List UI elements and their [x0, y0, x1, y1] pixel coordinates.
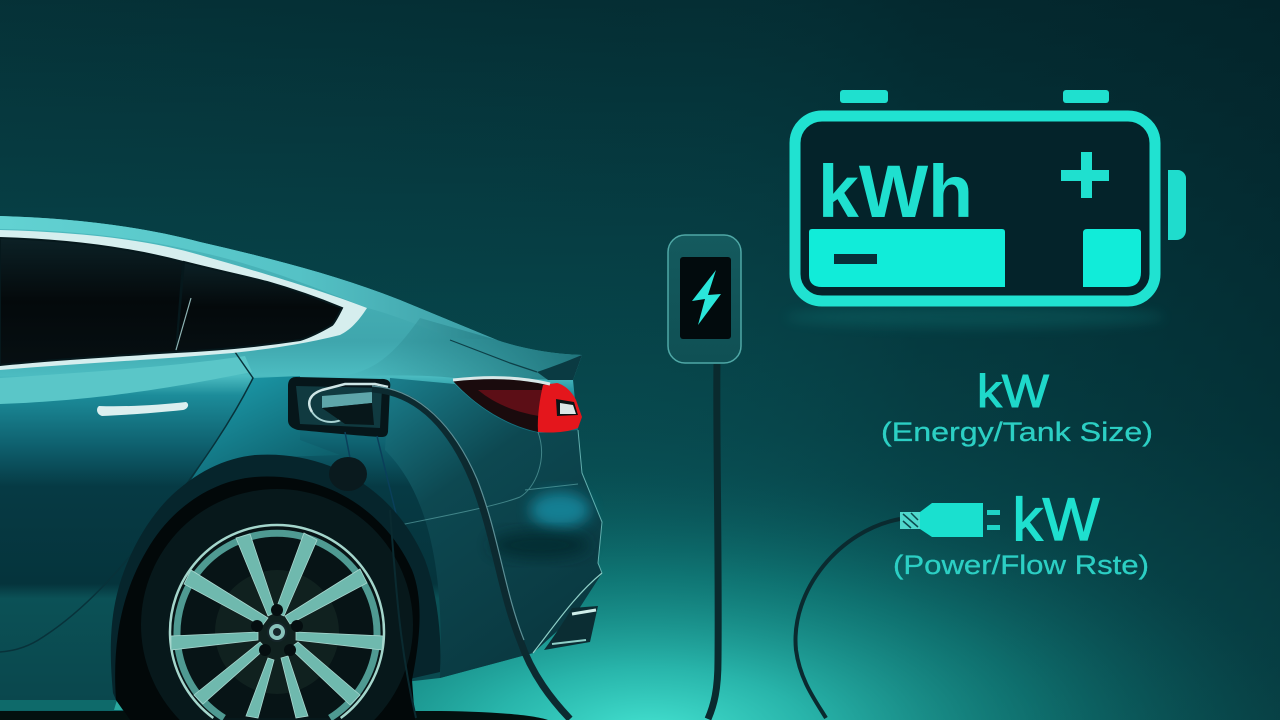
roof band highlight: [0, 216, 497, 340]
charging cable to car: [372, 386, 570, 719]
panel lines: [0, 352, 253, 652]
charger body: [668, 235, 741, 363]
rear panel: [385, 378, 602, 678]
battery glow: [785, 306, 1165, 328]
power caption: (Power/Flow Rste): [893, 550, 1149, 580]
floor patch by front of wheel: [114, 683, 162, 710]
rim band: [177, 533, 377, 718]
hub: [268, 623, 286, 641]
exhaust: [544, 606, 598, 650]
tail light: [453, 378, 582, 433]
terminal tabs: [840, 90, 888, 103]
power label with plug: [796, 486, 1149, 718]
plug cable: [796, 519, 900, 718]
lug nuts: [251, 604, 303, 656]
ground shadow: [0, 711, 548, 720]
wheel: [141, 489, 413, 720]
door swoosh highlight: [0, 356, 252, 404]
charger cable: [708, 364, 718, 719]
kW heading: kW: [977, 365, 1050, 417]
diffuser line: [533, 573, 602, 653]
port hanging lines: [345, 432, 400, 530]
wheel arch: [111, 455, 440, 720]
rim edge: [170, 525, 384, 718]
wall charger: [668, 235, 741, 719]
front window: [0, 238, 183, 365]
energy label: [881, 365, 1153, 447]
electric car side view: [0, 216, 602, 720]
window chrome frame: [0, 230, 367, 370]
charger screen: [680, 257, 731, 339]
battery icon: [785, 90, 1186, 328]
spokes: [171, 533, 383, 718]
rear edge highlight: [578, 430, 602, 573]
brake disc: [215, 570, 339, 694]
kW heading: kW: [1012, 486, 1100, 553]
kWh label: kWh: [818, 150, 973, 233]
rim disc: [170, 525, 384, 718]
rear shoulder shading: [340, 318, 582, 380]
plus sign: [1061, 152, 1109, 198]
spoiler shadow: [537, 355, 582, 380]
battery nub: [1168, 170, 1186, 240]
plug icon: [900, 503, 1000, 537]
crease line: [450, 340, 537, 372]
arch inner shadow: [115, 477, 420, 720]
right charge block: [1083, 229, 1141, 287]
bumper shadow: [490, 531, 590, 559]
window pillar line: [176, 298, 191, 350]
front quarter panel: [172, 376, 340, 510]
icon: lightning bolt: [692, 270, 721, 325]
door handle: [97, 402, 188, 416]
left charge block: [809, 229, 1005, 287]
port cap: [329, 457, 367, 491]
rear window: [176, 262, 342, 352]
energy caption: (Energy/Tank Size): [881, 417, 1153, 447]
charge port: [288, 377, 390, 437]
car body: [0, 216, 602, 700]
bumper highlight: [530, 492, 590, 528]
tyre: [141, 489, 413, 720]
floor strip under car: [0, 700, 120, 710]
minus sign: [834, 254, 877, 264]
battery outline: [795, 116, 1155, 301]
